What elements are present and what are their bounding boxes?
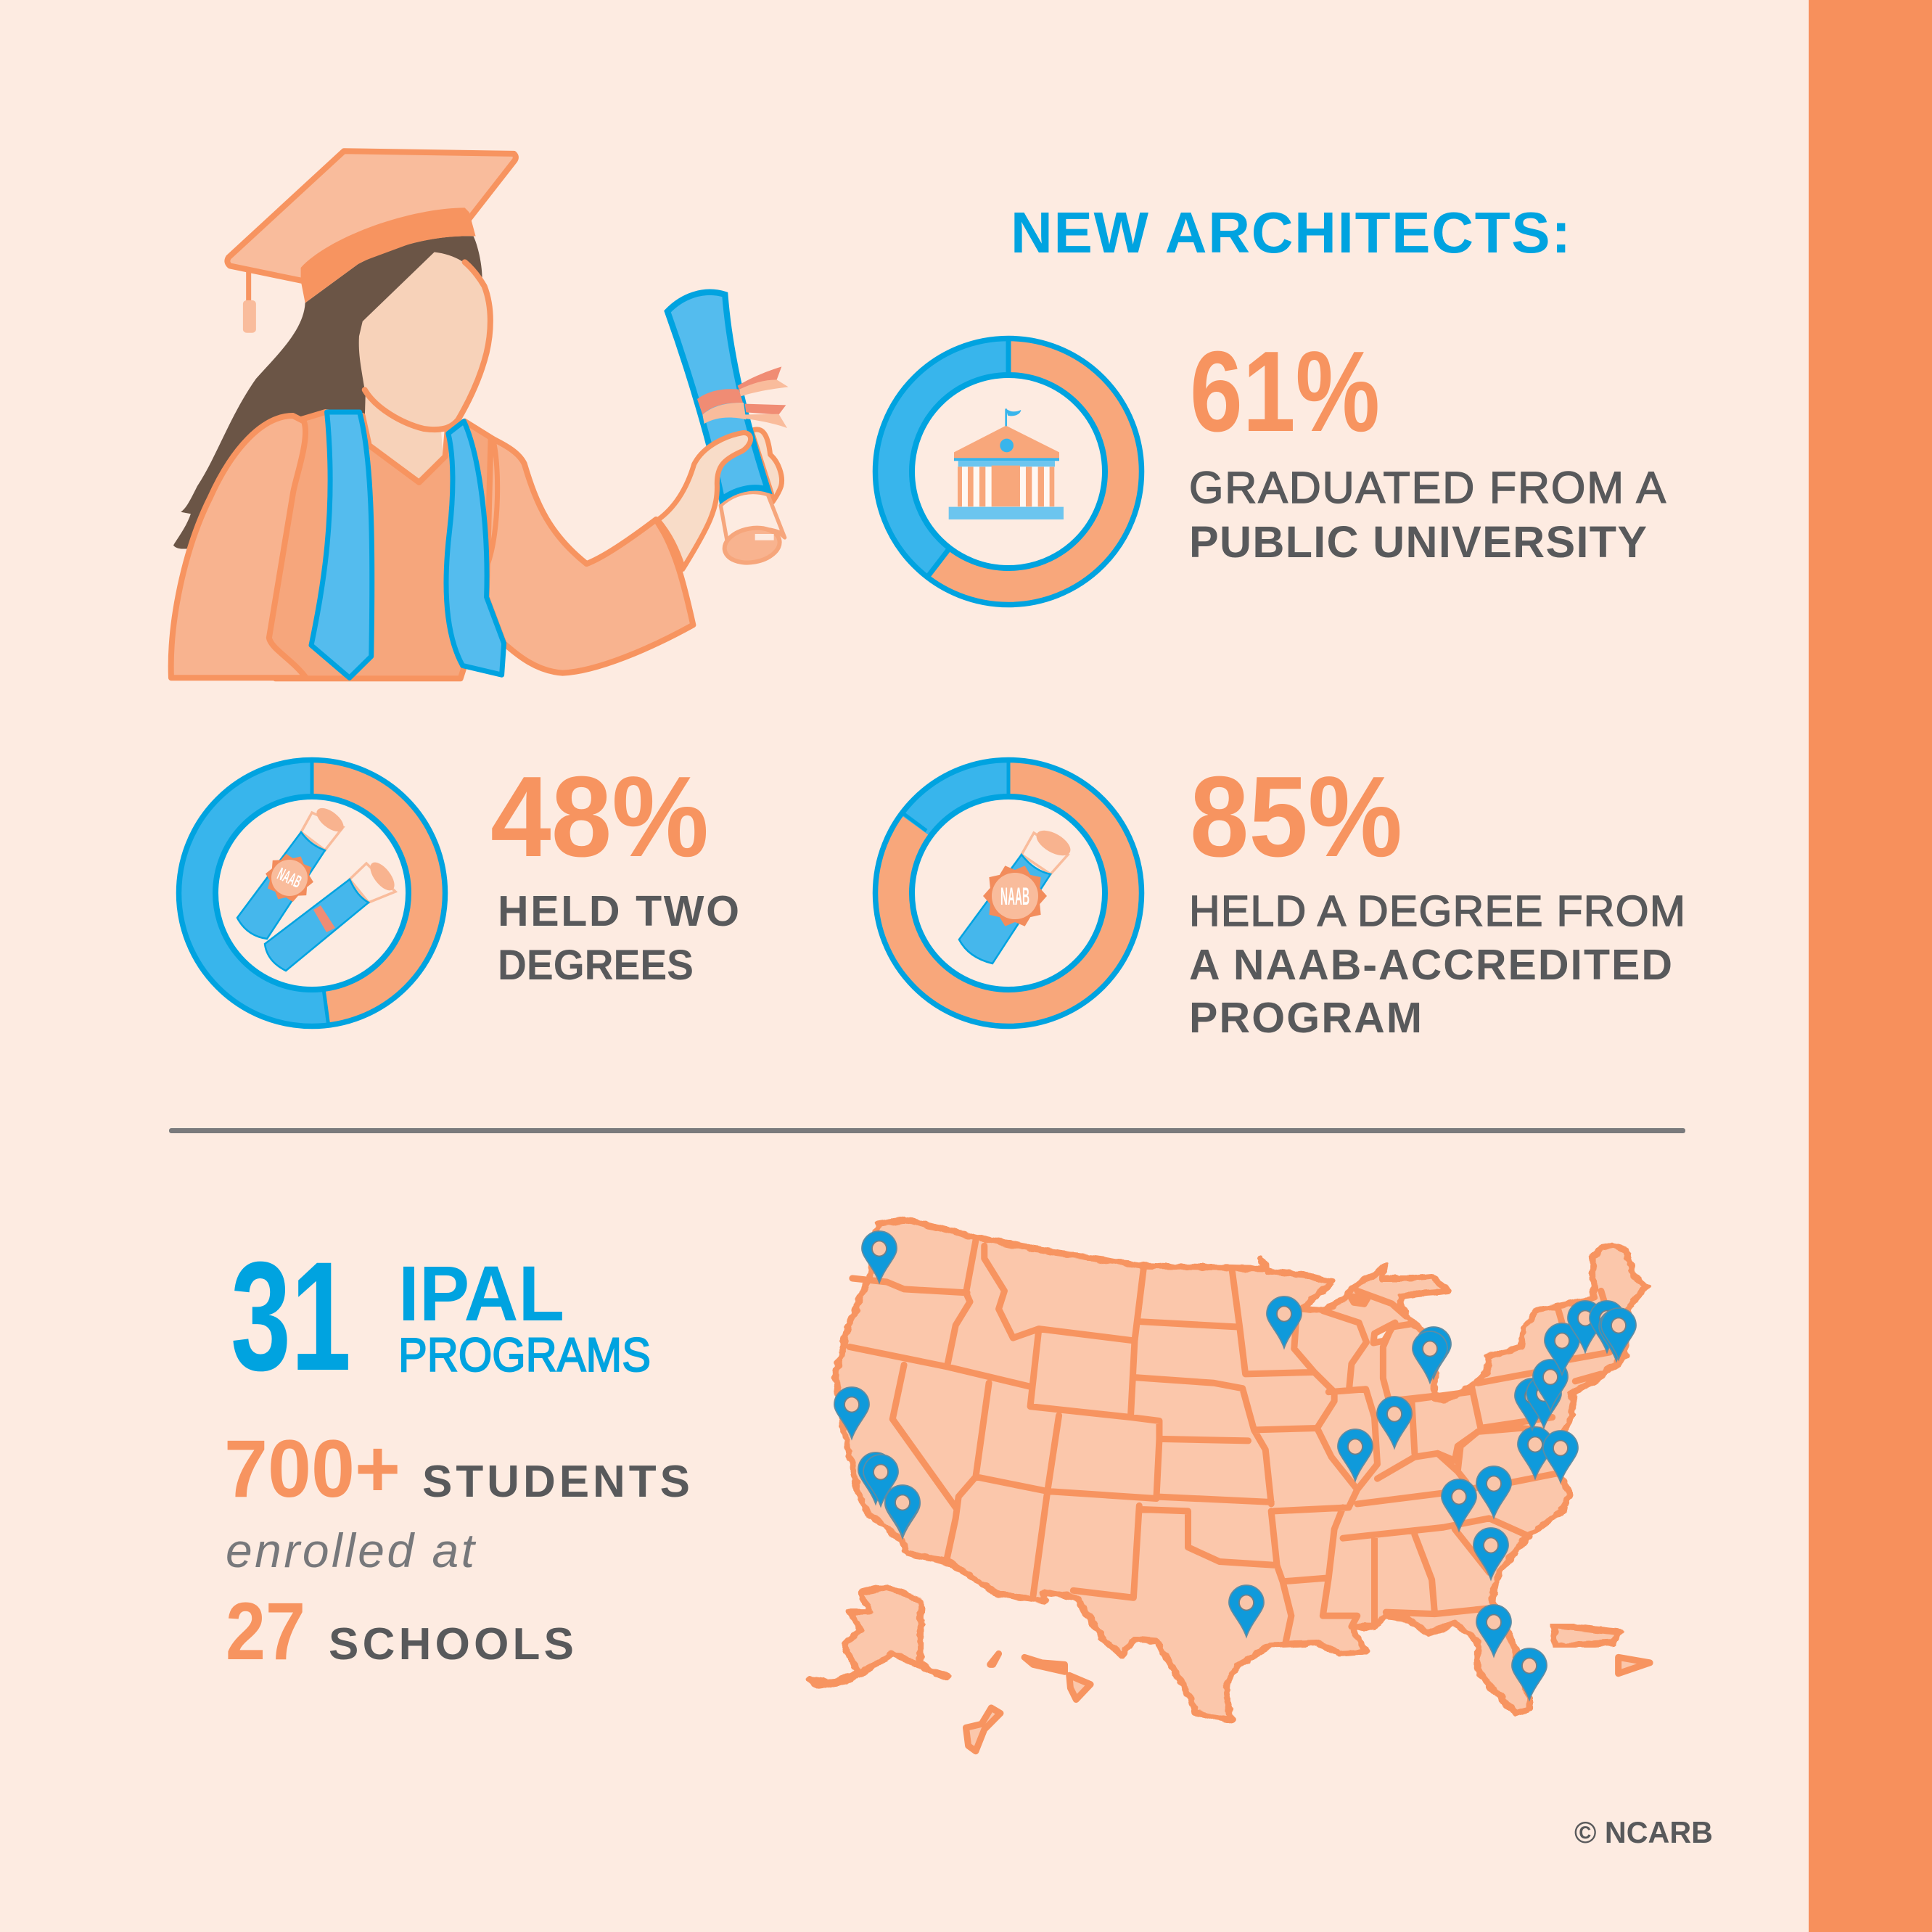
map: United States with program pins bbox=[810, 1220, 1650, 1751]
divider bbox=[169, 1128, 1685, 1133]
icon: university building bbox=[949, 408, 1064, 519]
figure body bbox=[171, 151, 693, 678]
icon: two diplomas with NAAB seal: NAAB bbox=[274, 864, 304, 892]
stat: 61%: 61% bbox=[1190, 328, 1380, 456]
tassel bbox=[243, 271, 256, 333]
stat: 48%: 48% bbox=[490, 753, 709, 881]
stat: 700+ students enrolled at 27 schools bbox=[224, 1423, 690, 1677]
stat: 31 IPAL programs: PROGRAMS bbox=[398, 1328, 651, 1381]
stat: 700+ students enrolled at 27 schools: 700+ bbox=[224, 1423, 400, 1514]
sleeve cuff bbox=[656, 519, 682, 572]
right sleeve bbox=[487, 438, 693, 673]
face outline bbox=[365, 262, 490, 429]
left stole bbox=[311, 412, 372, 678]
left sleeve bbox=[171, 416, 306, 678]
diploma paper bbox=[720, 492, 785, 543]
cap band bbox=[301, 207, 476, 303]
face bbox=[359, 252, 490, 429]
label: graduated from a public university: GRADUATED FROM A bbox=[1189, 463, 1666, 512]
icon: diploma with NAAB seal: NAAB bbox=[1000, 883, 1029, 910]
ribbon bbox=[697, 366, 789, 428]
heading: NEW ARCHITECTS: bbox=[1011, 200, 1571, 265]
label: held a degree from a NAAB-accredited program bbox=[1189, 887, 1685, 1042]
icon: diploma with NAAB seal bbox=[959, 826, 1074, 963]
label: held two degrees bbox=[498, 887, 739, 989]
label: graduated from a public university: PUBLIC UNIVERSITY bbox=[1189, 517, 1647, 567]
map shapes bbox=[810, 1220, 1650, 1751]
label: graduated from a public university bbox=[1189, 463, 1666, 567]
back fingers bbox=[752, 429, 782, 502]
donut: 61 percent public university bbox=[875, 337, 1142, 605]
label: held two degrees: HELD TWO bbox=[498, 887, 739, 935]
stat: 700+ students enrolled at 27 schools: STUDENTS bbox=[422, 1457, 690, 1507]
stat: 700+ students enrolled at 27 schools: SCHOOLS bbox=[329, 1619, 574, 1669]
mainland bbox=[835, 1220, 1647, 1720]
right stole bbox=[446, 422, 504, 675]
lake holes bbox=[1350, 1296, 1395, 1343]
front hand bbox=[658, 433, 751, 568]
stat: 31 IPAL programs: IPAL bbox=[398, 1249, 564, 1337]
donut: 48 percent two degrees bbox=[178, 759, 445, 1027]
stat: 700+ students enrolled at 27 schools: enrolled at bbox=[226, 1524, 477, 1577]
Alaska bbox=[810, 1587, 947, 1686]
stat: 31 IPAL programs bbox=[231, 1230, 651, 1403]
stat: 85%: 85% bbox=[1190, 753, 1402, 881]
label: held two degrees: DEGREES bbox=[498, 942, 694, 989]
copyright: © NCARB bbox=[1574, 1815, 1713, 1849]
neck bbox=[365, 390, 443, 482]
diploma roll end bbox=[722, 524, 782, 567]
mortarboard bbox=[227, 151, 516, 281]
label: held a degree from a NAAB-accredited program: HELD A DEGREE FROM bbox=[1189, 887, 1685, 935]
donut: 85 percent NAAB accredited bbox=[875, 759, 1142, 1026]
stat: 700+ students enrolled at 27 schools: 27 bbox=[226, 1586, 305, 1677]
label: held a degree from a NAAB-accredited program: PROGRAM bbox=[1189, 994, 1422, 1042]
location pins bbox=[834, 1231, 1636, 1700]
Virgin Islands bbox=[1619, 1657, 1650, 1674]
hand holding diploma bbox=[656, 292, 789, 572]
Hawaii bbox=[990, 1653, 1090, 1700]
stat: 31 IPAL programs: 31 bbox=[231, 1230, 351, 1403]
state borders bbox=[850, 1241, 1610, 1643]
hair bbox=[173, 236, 482, 549]
gown body bbox=[263, 412, 502, 678]
Puerto Rico bbox=[1553, 1625, 1621, 1646]
diploma blue roll bbox=[667, 292, 768, 499]
right side orange bar bbox=[1809, 0, 1932, 1932]
Guam bbox=[966, 1708, 1000, 1751]
illustration: graduate holding diploma bbox=[171, 151, 789, 678]
icon: two diplomas with NAAB seal bbox=[237, 804, 399, 971]
label: held a degree from a NAAB-accredited program: A NAAB-ACCREDITED bbox=[1189, 941, 1672, 989]
gown inner fold bbox=[488, 440, 498, 564]
